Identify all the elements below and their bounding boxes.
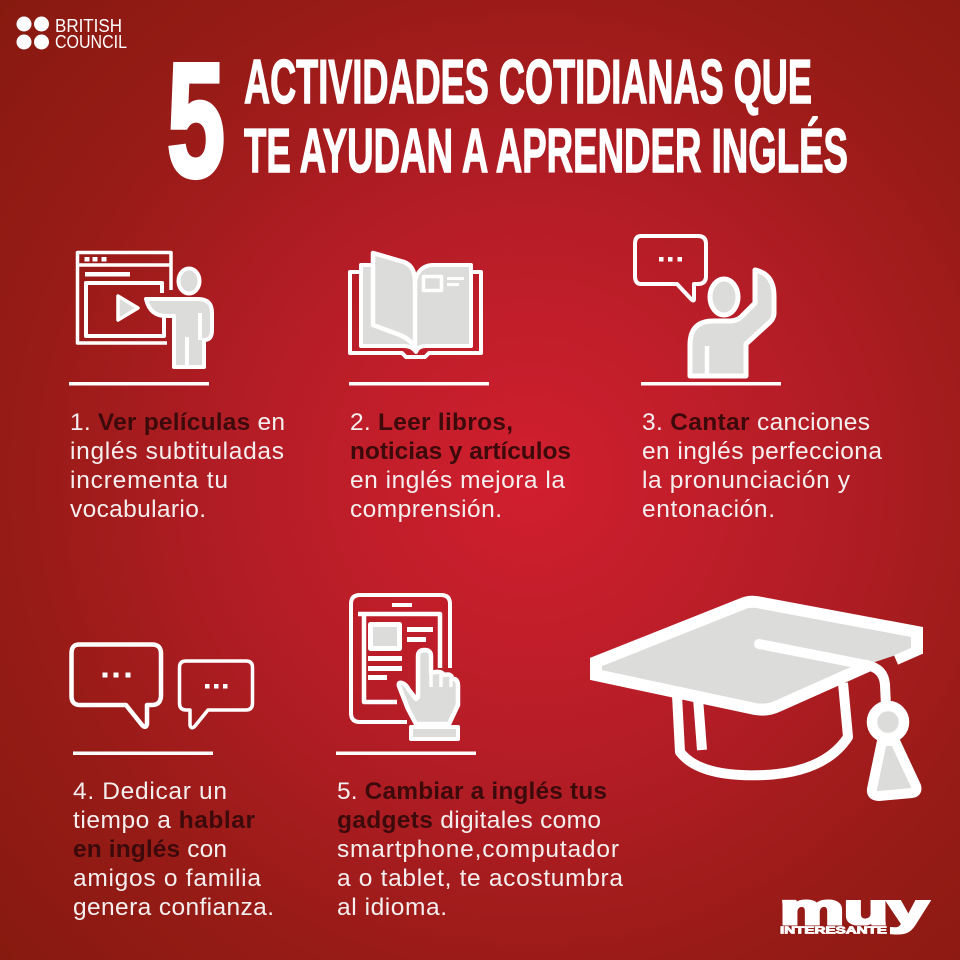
panel: activity 2 xyxy=(349,253,571,523)
text block xyxy=(73,778,274,921)
text block: 5. Cambiar a inglés tus xyxy=(337,778,607,805)
divider xyxy=(336,752,476,755)
icon: tablet and hand xyxy=(351,595,458,739)
icon: graduation cap xyxy=(595,602,921,796)
panel: activity 3 xyxy=(635,236,882,523)
panel: activity 5 xyxy=(336,595,623,921)
text block: entonación. xyxy=(642,496,775,523)
text block xyxy=(642,409,882,523)
icon: open book xyxy=(350,253,481,357)
text block: vocabulario. xyxy=(70,496,206,523)
divider xyxy=(69,382,209,386)
title xyxy=(167,30,848,211)
logo: British Council xyxy=(16,16,127,52)
text block: tiempo a hablar xyxy=(73,807,255,834)
text block: en inglés perfecciona xyxy=(642,438,882,465)
icon: video lesson xyxy=(78,252,212,367)
icon: speech bubbles xyxy=(72,644,252,728)
text block xyxy=(70,409,285,523)
logo: Muy Interesante: muy xyxy=(780,886,928,934)
text block: a o tablet, te acostumbra xyxy=(337,865,623,892)
text block: al idioma. xyxy=(337,894,447,921)
text block: inglés subtituladas xyxy=(70,438,284,465)
logo: British Council: BRITISH xyxy=(55,16,122,36)
text block xyxy=(350,409,571,523)
text block: amigos o familia xyxy=(73,865,261,892)
text block: 3. Cantar canciones xyxy=(642,409,870,436)
logo: Muy Interesante xyxy=(778,886,928,936)
divider xyxy=(73,752,213,755)
text block: 2. Leer libros, xyxy=(350,409,513,436)
text block: genera confianza. xyxy=(73,894,274,921)
text block xyxy=(337,778,623,921)
panel: activity 4 xyxy=(72,644,274,921)
text block: comprensión. xyxy=(350,496,502,523)
text block: 1. Ver películas en xyxy=(70,409,285,436)
text block: en inglés mejora la xyxy=(350,467,565,494)
text block: gadgets digitales como xyxy=(337,807,601,834)
divider xyxy=(349,382,489,386)
text block: en inglés con xyxy=(73,836,227,863)
logo: British Council: COUNCIL xyxy=(55,32,127,52)
divider xyxy=(641,382,781,386)
text block: noticias y artículos xyxy=(350,438,571,465)
text block: 4. Dedicar un xyxy=(73,778,227,805)
logo: Muy Interesante: INTERESANTE xyxy=(780,926,887,936)
text block: la pronunciación y xyxy=(642,467,851,494)
text block: smartphone,computador xyxy=(337,836,619,863)
title: 5 xyxy=(167,30,225,211)
text block: incrementa tu xyxy=(70,467,228,494)
icon: person singing xyxy=(635,236,774,376)
panel: activity 1 xyxy=(69,252,285,523)
